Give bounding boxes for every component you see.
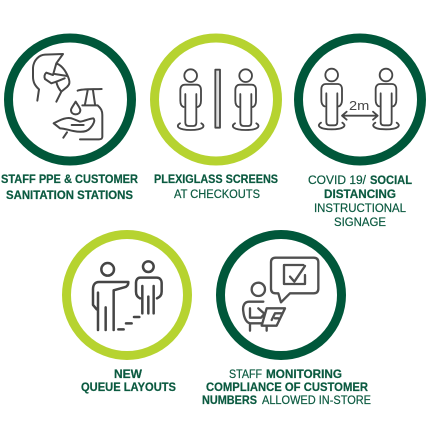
ring: dark green <box>298 38 422 161</box>
caption: SANITATION STATIONS <box>6 190 133 202</box>
caption <box>308 175 412 229</box>
caption <box>81 369 176 394</box>
caption: SIGNAGE <box>334 217 386 229</box>
caption <box>1 174 139 202</box>
caption: DISTANCING <box>324 189 396 201</box>
caption: QUEUE LAYOUTS <box>81 382 176 394</box>
caption: STAFF PPE & CUSTOMER <box>1 174 139 186</box>
ring: lime <box>66 234 188 356</box>
caption: ALLOWED IN-STORE <box>262 395 371 407</box>
icon: two people and screen <box>178 69 258 130</box>
ring: dark green <box>8 38 132 161</box>
caption: INSTRUCTIONAL <box>314 203 407 215</box>
icon: person with checklist speech bubble <box>243 258 318 331</box>
icon: two people 2m apart: 2m <box>349 99 369 113</box>
panel: staff PPE and sanitation <box>1 38 139 202</box>
caption: PLEXIGLASS SCREENS <box>154 174 278 186</box>
caption: NEW <box>114 369 142 381</box>
ring: lime <box>154 38 278 161</box>
caption: COMPLIANCE OF CUSTOMER <box>206 382 369 394</box>
caption: NUMBERS <box>202 395 257 407</box>
icon: queueing people <box>93 261 162 330</box>
panel: social distancing <box>298 38 422 229</box>
caption: COVID 19/ <box>308 175 367 187</box>
icon: two people 2m apart <box>319 69 399 129</box>
panel: plexiglass screens <box>154 38 278 201</box>
caption: STAFF <box>229 369 262 381</box>
caption <box>202 369 371 407</box>
ring: dark green <box>220 234 342 356</box>
caption: MONITORING <box>266 369 342 381</box>
panel: new queue layouts <box>66 234 188 394</box>
caption <box>154 174 278 201</box>
caption: AT CHECKOUTS <box>174 189 260 201</box>
caption: SOCIAL <box>370 175 412 187</box>
icon: masked head and sanitiser <box>33 54 102 139</box>
panel: staff monitoring <box>202 234 371 407</box>
